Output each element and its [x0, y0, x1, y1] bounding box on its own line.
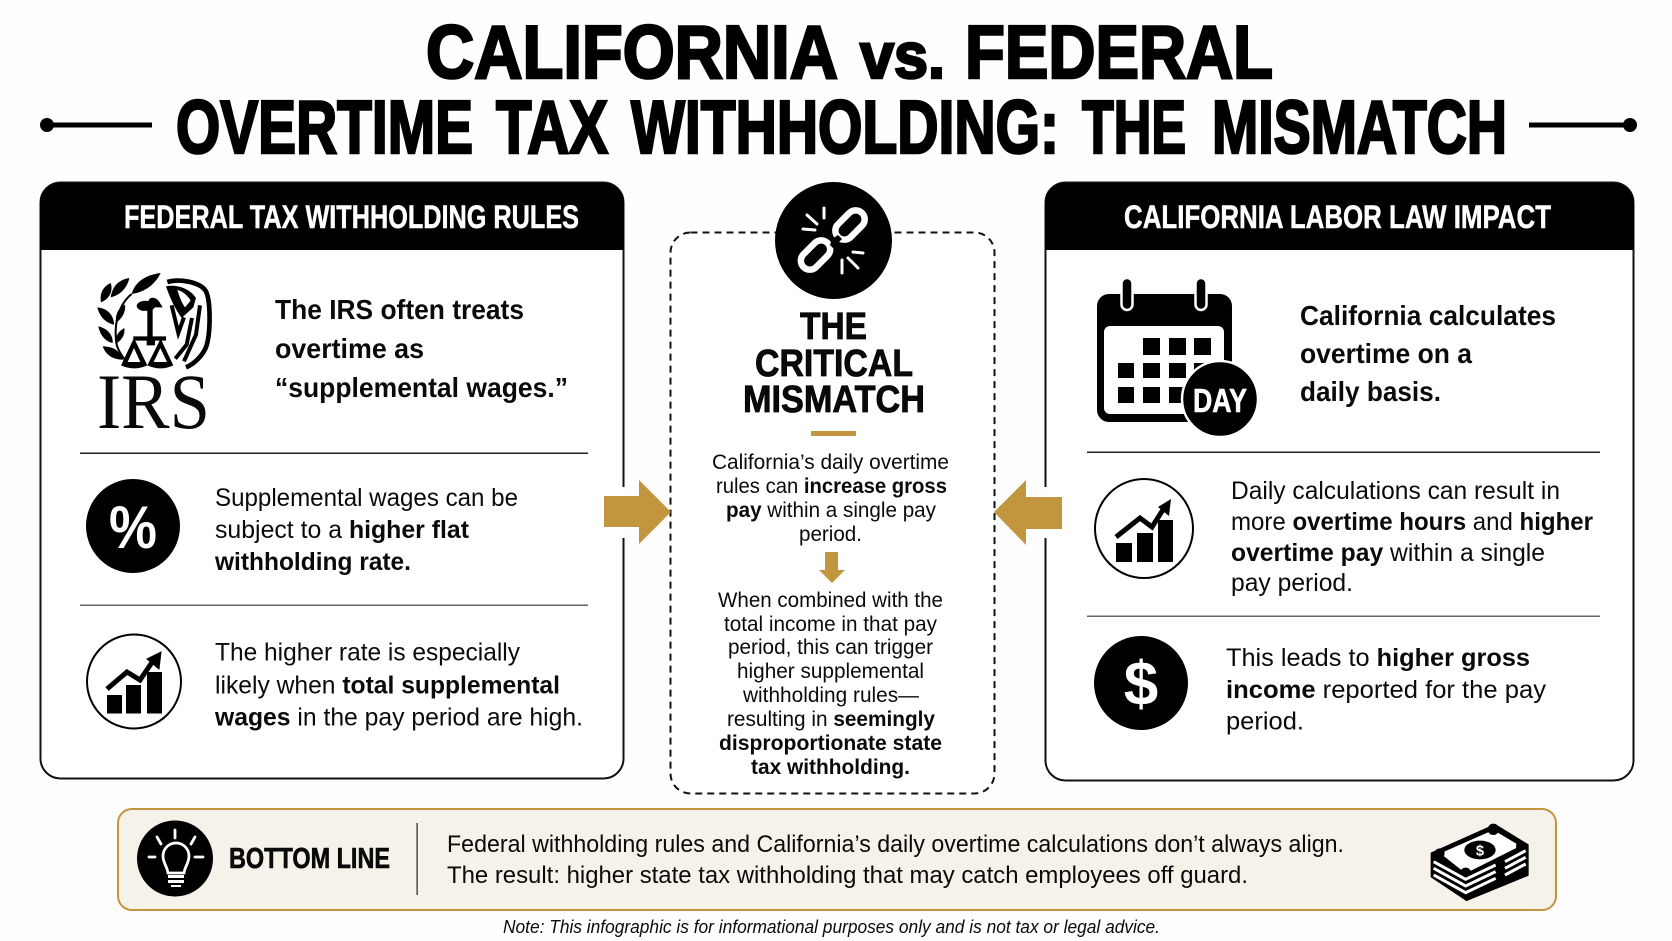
text: bottom line message [447, 831, 1344, 889]
lead text: IRS supplemental wages: overtime as [275, 333, 424, 364]
text: gross income: income reported for the pay [1226, 676, 1547, 704]
panel header: federal [40, 183, 624, 250]
panel: federal tax withholding rules [40, 182, 624, 778]
text: daily calculations: more overtime hours and higher [1231, 508, 1593, 536]
lead text: daily basis: California calculates [1300, 300, 1556, 331]
title: FEDERAL [965, 10, 1273, 94]
lead text: IRS supplemental wages: The IRS often treats [275, 294, 524, 325]
panel header: california: CALIFORNIA LABOR LAW IMPACT [1124, 199, 1551, 235]
title: CALIFORNIA [426, 10, 838, 94]
text: higher rate: likely when total supplemental [215, 672, 560, 700]
icon: IRS logo: IRS [97, 358, 210, 445]
title rule: right [1529, 118, 1637, 132]
text: gross income: This leads to higher gross [1226, 644, 1530, 672]
lead text: IRS supplemental wages: “supplemental wages.” [275, 372, 568, 403]
lead text: daily basis: overtime on a [1300, 338, 1472, 369]
text: combined effect: tax withholding. [751, 756, 910, 779]
lead text: daily basis [1300, 300, 1556, 407]
text: combined effect: higher supplemental [737, 660, 924, 683]
title: THE [1082, 85, 1186, 169]
text: daily calculations: overtime pay within a single [1231, 539, 1545, 567]
text: combined effect: withholding rules— [742, 684, 919, 707]
title: MISMATCH [1212, 85, 1507, 169]
arrow: right to center [994, 480, 1062, 545]
heading: the critical mismatch: CRITICAL [755, 343, 913, 385]
lead text: IRS supplemental wages [275, 294, 568, 403]
icon: money stack: $ [1476, 843, 1484, 859]
text: higher rate: The higher rate is especially [215, 638, 520, 666]
text: combined effect: total income in that pay [724, 613, 937, 636]
text: supplemental rate [214, 484, 518, 576]
panel header: california [1045, 183, 1634, 250]
icon: rising chart [1095, 479, 1193, 578]
text: combined effect [718, 589, 943, 779]
text: bottom line message: The result: higher state tax withholding that may catch employees off guard. [447, 862, 1248, 889]
text: gross income: period. [1226, 708, 1304, 736]
panel: california labor law impact [1045, 182, 1634, 780]
label: bottom line: BOTTOM LINE [229, 843, 390, 875]
text: daily calculations: pay period. [1231, 569, 1353, 597]
text: daily overtime rules: pay within a single pay [726, 499, 936, 522]
icon: dollar [1094, 636, 1188, 730]
icon: broken chain [775, 182, 892, 299]
icon: calendar day [1097, 278, 1258, 437]
text: combined effect: When combined with the [718, 589, 943, 612]
icon: percent: % [109, 494, 157, 561]
title [176, 10, 1507, 169]
text: combined effect: period, this can trigger [728, 636, 933, 659]
panel: bottom line [118, 809, 1556, 910]
text: daily calculations [1231, 477, 1593, 597]
text: daily overtime rules: rules can increase gross [716, 475, 947, 498]
title: vs. [860, 19, 945, 92]
text: combined effect: resulting in seemingly [727, 708, 935, 731]
heading: the critical mismatch: MISMATCH [743, 379, 925, 421]
note: Note: This infographic is for informational purposes only and is not tax or legal advice. [503, 917, 1160, 937]
title: TAX [496, 85, 608, 169]
icon: percent [86, 479, 180, 573]
text: bottom line message: Federal withholding rules and California’s daily overtime calculations don’t always align. [447, 831, 1344, 858]
arrow: left to center [604, 480, 671, 544]
text: higher rate [214, 638, 583, 732]
text: combined effect: disproportionate state [719, 732, 942, 755]
title: WITHHOLDING: [631, 85, 1059, 169]
text: daily overtime rules: California’s daily overtime [712, 451, 949, 474]
panel header: federal: FEDERAL TAX WITHHOLDING RULES [124, 199, 579, 235]
title rule: left [40, 118, 152, 132]
text: supplemental rate: subject to a higher flat [215, 516, 470, 544]
text: supplemental rate: Supplemental wages can be [215, 484, 518, 512]
icon: light bulb [137, 820, 213, 896]
text: daily overtime rules: period. [799, 523, 862, 546]
title: OVERTIME [176, 85, 473, 169]
arrow: down [819, 552, 845, 583]
icon: money stack [1432, 824, 1528, 900]
icon: calendar day: DAY [1193, 382, 1247, 419]
text: supplemental rate: withholding rate. [214, 548, 411, 576]
text: daily overtime rules [712, 451, 949, 546]
heading: the critical mismatch [743, 306, 925, 421]
lead text: daily basis: daily basis. [1300, 376, 1441, 407]
heading: the critical mismatch: THE [800, 306, 867, 348]
text: gross income [1226, 644, 1547, 736]
icon: rising chart [87, 634, 181, 728]
text: higher rate: wages in the pay period are high. [214, 704, 583, 732]
panel: critical mismatch [670, 182, 994, 794]
text: daily calculations: Daily calculations can result in [1231, 477, 1560, 505]
icon: IRS logo [97, 273, 210, 445]
icon: dollar: $ [1124, 650, 1158, 719]
